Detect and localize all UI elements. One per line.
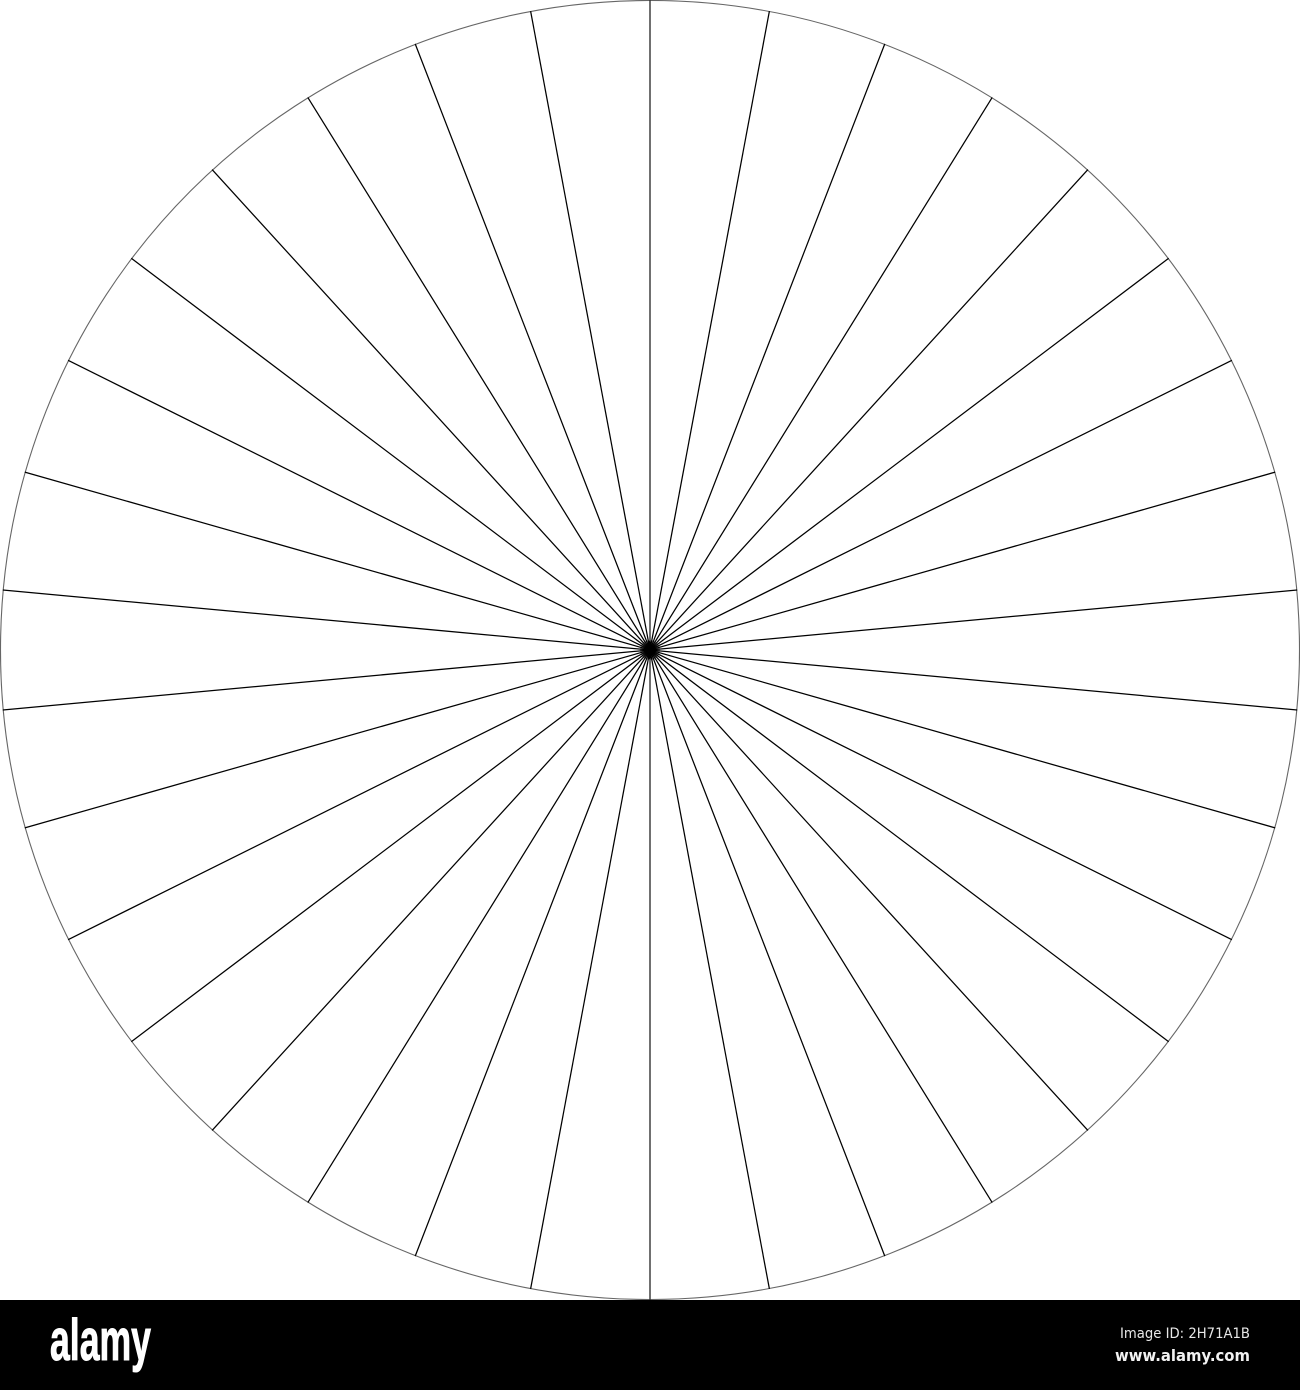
watermark footer bar bbox=[0, 1300, 1300, 1390]
website address: www.alamy.com bbox=[1115, 1346, 1250, 1365]
alamy logo wordmark: alamy bbox=[50, 1308, 151, 1373]
image id: Image ID: 2H71A1B bbox=[1120, 1326, 1250, 1342]
dense centre hub bbox=[646, 641, 652, 659]
centre hub halo bbox=[640, 640, 660, 660]
